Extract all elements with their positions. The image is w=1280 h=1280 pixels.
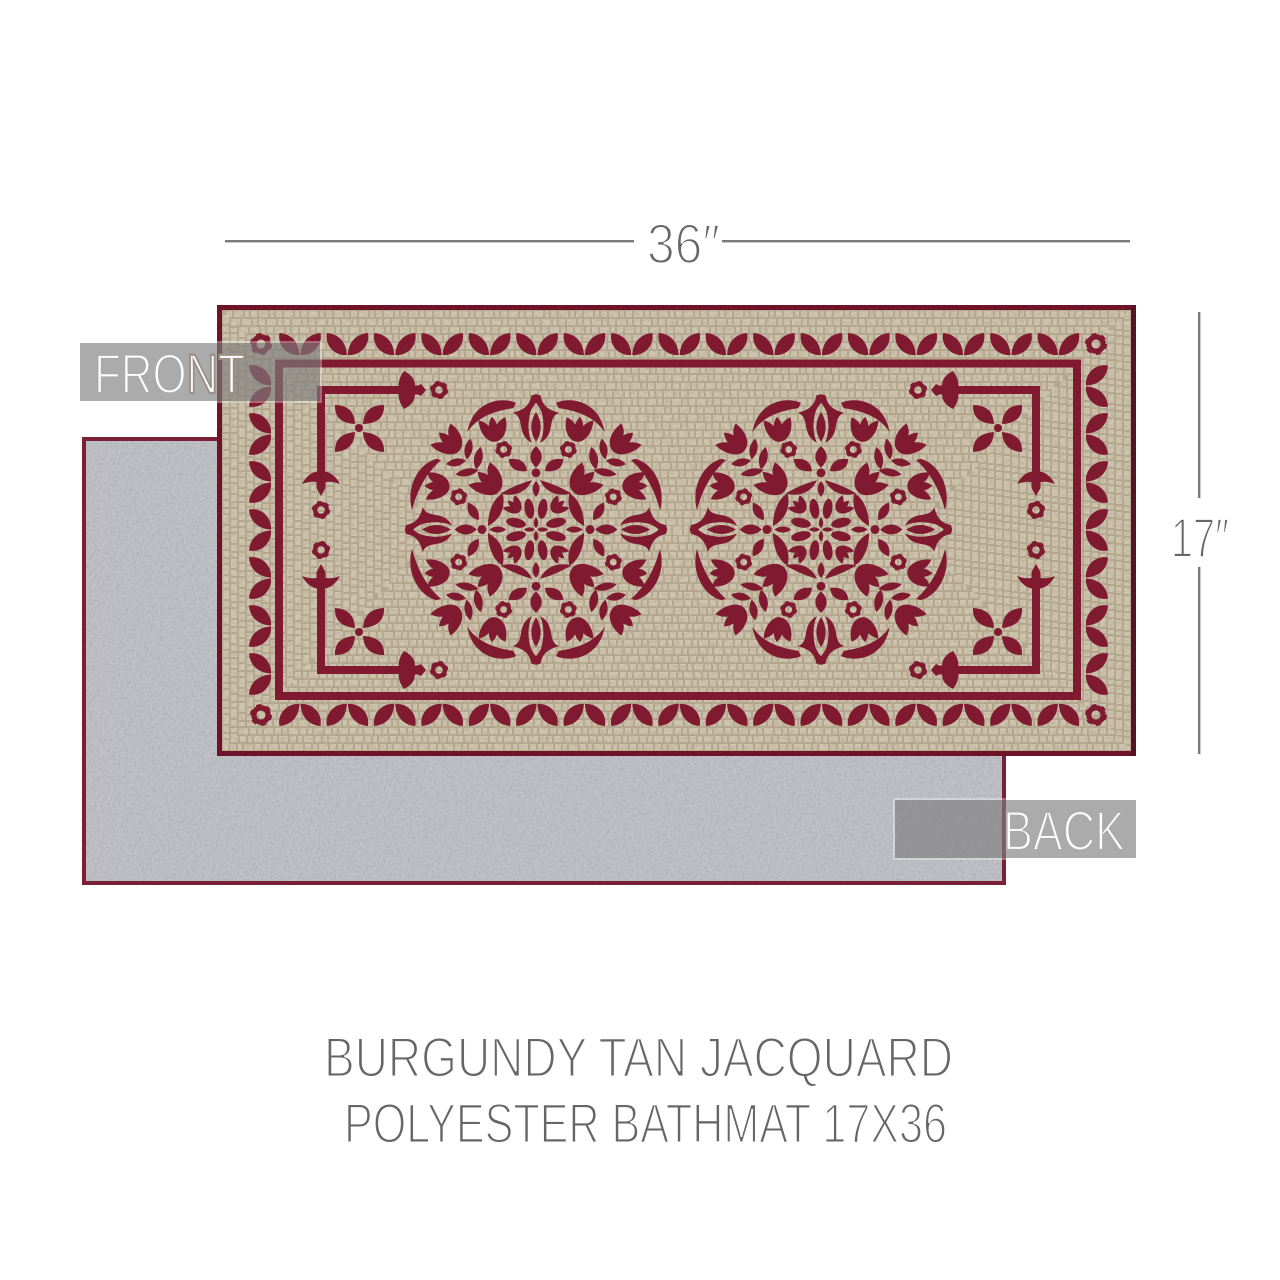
dimension: width 36 inches: 36″ <box>647 212 720 275</box>
right leaf border <box>1086 365 1108 695</box>
top leaf border <box>279 333 1079 355</box>
label: back: BACK <box>1003 799 1125 862</box>
label: front <box>79 342 321 405</box>
bottom leaf border <box>279 704 1079 726</box>
product title <box>324 1026 953 1154</box>
left leaf border <box>249 365 271 695</box>
label: back <box>894 799 1137 862</box>
dimension: height 17 inches: 17″ <box>1171 506 1229 569</box>
mat edge binding <box>220 305 1136 756</box>
label: front: FRONT <box>94 342 245 405</box>
inner border band <box>279 364 1077 696</box>
back of mat <box>84 439 1004 883</box>
product title: POLYESTER BATHMAT 17X36 <box>344 1092 947 1154</box>
left medallion <box>405 394 667 665</box>
front of mat <box>219 305 1136 756</box>
corner bracket ornaments <box>302 371 1055 689</box>
right medallion <box>690 394 952 665</box>
corner rosettes <box>251 334 1106 725</box>
product title: BURGUNDY TAN JACQUARD <box>324 1026 953 1088</box>
mat braided base <box>219 307 1134 754</box>
